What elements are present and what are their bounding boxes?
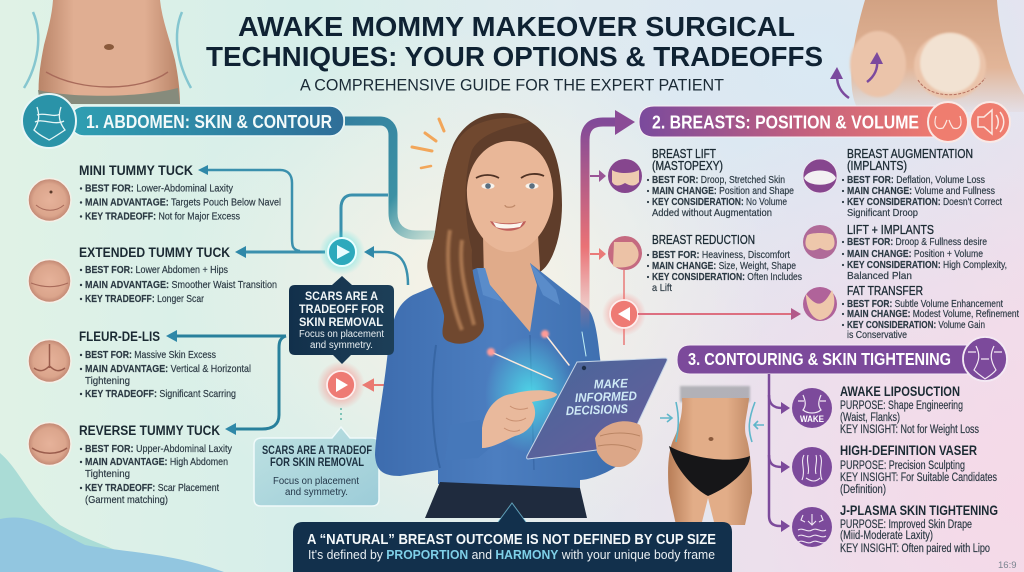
callout: scars dark: SCARS ARE A: [305, 289, 378, 303]
connectors: tummy tuck arrows: [166, 165, 408, 435]
panel: item awake liposuction: AWAKE LIPOSUCTION: [840, 384, 960, 399]
panel: item mini tummy tuck: [28, 163, 281, 222]
callout: scars dark: Focus on placement: [299, 329, 384, 340]
panel: item reverse tummy tuck: Tightening: [85, 468, 130, 480]
panel: item extended tummy tuck: EXTENDED TUMMY TUCK: [79, 245, 230, 260]
panel: item fleur-de-lis: FLEUR-DE-LIS: [79, 329, 160, 344]
panel: item awake liposuction: KEY INSIGHT: Not for Weight Loss: [840, 424, 979, 436]
title: AWAKE MOMMY MAKEOVER SURGICAL: [238, 11, 795, 42]
panel: item fat transfer: FAT TRANSFER: [847, 284, 923, 298]
callout: scars light: Focus on placement: [273, 476, 359, 487]
arrowhead: breasts trunk: [615, 110, 635, 135]
icon: orange sparks: [412, 119, 444, 168]
tablet: INFORMED: [575, 389, 637, 405]
panel: item breast reduction: a Lift: [652, 282, 672, 294]
light rays: [487, 330, 586, 379]
tablet: DECISIONS: [566, 402, 629, 418]
icon: wake: [792, 388, 832, 428]
button: red play: [317, 361, 384, 422]
panel: item fat transfer: is Conservative: [847, 329, 907, 341]
panel: item lift plus implants: KEY CONSIDERATION: High Complexity,: [847, 259, 1007, 271]
panel: item breast lift: (MASTOPEXY): [652, 159, 723, 173]
callout: scars light: FOR SKIN REMOVAL: [270, 457, 364, 469]
panel: item breast augmentation: KEY CONSIDERATION: Doesn't Correct: [847, 196, 1002, 208]
panel: item mini tummy tuck: MINI TUMMY TUCK: [79, 163, 193, 178]
panel: item lift plus implants: MAIN CHANGE: Position + Volume: [847, 248, 983, 260]
panel: item breast lift: MAIN CHANGE: Position and Shape: [652, 185, 794, 197]
right hand: [595, 421, 643, 467]
panel: item j-plasma: (Miid-Moderate Laxity): [840, 530, 933, 542]
face: [467, 141, 553, 252]
icon: fleur-de-lis scar: [28, 340, 71, 382]
icon: fat transfer: [803, 287, 837, 321]
icon: extended tuck: [28, 260, 71, 302]
icon: mini tuck: [28, 178, 71, 222]
panel: breasts header: [639, 102, 1010, 142]
panel: item high-definition vaser: PURPOSE: Precision Sculpting: [840, 460, 965, 472]
icon: implant: [803, 159, 837, 193]
panel: item mini tummy tuck: MAIN ADVANTAGE: Targets Pouch Below Navel: [85, 196, 281, 208]
panel: item lift plus implants: LIFT + IMPLANTS: [847, 223, 934, 237]
panel: item j-plasma: PURPOSE: Improved Skin Drape: [840, 519, 972, 531]
panel: item breast reduction: BEST FOR: Heaviness, Discomfort: [652, 249, 790, 261]
panel: item breast reduction: BREAST REDUCTION: [652, 233, 755, 247]
panel: item fleur-de-lis: BEST FOR: Massive Skin Excess: [85, 349, 216, 361]
connector: contouring tree: [769, 374, 790, 532]
panel: item breast augmentation: [803, 147, 1002, 219]
icon: reverse tuck: [28, 422, 71, 466]
panel: item breast lift: KEY CONSIDERATION: No Volume: [652, 196, 787, 208]
panel: item extended tummy tuck: [28, 245, 277, 305]
brows eyes nose mouth: [476, 174, 544, 231]
button: teal play: [319, 229, 365, 275]
icon: abdomen: [22, 94, 76, 148]
panel: item breast lift: Added without Augmentation: [652, 207, 772, 219]
panel: abdomen header: 1. ABDOMEN: SKIN & CONTOUR: [86, 112, 332, 132]
connector: abdomen trunk: [345, 121, 436, 235]
icon: breasts: [928, 102, 968, 142]
callout: scars dark: TRADEOFF FOR: [299, 302, 384, 316]
panel: item breast lift: [608, 147, 794, 219]
icon: waist: [963, 337, 1007, 381]
panel: item breast augmentation: MAIN CHANGE: Volume and Fullness: [847, 185, 995, 197]
panel: item lift plus implants: BEST FOR: Droop & Fullness desire: [847, 236, 987, 248]
callout: scars light: SCARS ARE A TRADEOF: [262, 445, 372, 457]
panel: item fleur-de-lis: MAIN ADVANTAGE: Vertical & Horizontal: [85, 363, 251, 375]
panel: item fleur-de-lis: KEY TRADEOFF: Significant Scarring: [85, 388, 236, 400]
panel: item reverse tummy tuck: REVERSE TUMMY TUCK: [79, 423, 220, 438]
photo: contoured torso: [660, 386, 764, 530]
tablet: [527, 358, 667, 459]
panel: item j-plasma: KEY INSIGHT: Often paired with Lipo: [840, 543, 990, 555]
pointing hand: [482, 390, 557, 448]
aspect ratio label: 16:9: [998, 560, 1016, 571]
panel: item breast augmentation: BEST FOR: Deflation, Volume Loss: [847, 174, 985, 186]
panel: item high-definition vaser: [792, 443, 997, 496]
callout: scars light: and symmetry.: [285, 487, 348, 498]
panel: item fat transfer: [803, 284, 1019, 341]
illustration: presenter: [375, 113, 667, 518]
pants: [425, 482, 587, 518]
hair left lock: [428, 118, 530, 344]
panel: item fleur-de-lis: Tightening: [85, 375, 130, 387]
panel: item breast augmentation: Significant Droop: [847, 207, 918, 219]
callout: natural outcome banner: [293, 503, 732, 572]
panel: item fleur-de-lis: [28, 329, 251, 400]
title: [206, 11, 823, 72]
panel: item breast augmentation: BREAST AUGMENTATION: [847, 147, 973, 161]
icon: reduction: [608, 236, 642, 270]
panel: item lift plus implants: Balanced Plan: [847, 270, 912, 282]
panel: item reverse tummy tuck: KEY TRADEOFF: Scar Placement: [85, 482, 219, 494]
blouse: [375, 263, 618, 492]
panel: item breast reduction: MAIN CHANGE: Size, Weight, Shape: [652, 260, 796, 272]
connector: small breast arrows: [590, 170, 606, 260]
panel: item j-plasma: [792, 503, 998, 555]
callout: scars dark: [289, 276, 394, 364]
panel: item extended tummy tuck: MAIN ADVANTAGE: Smoother Waist Transition: [85, 279, 277, 291]
panel: contouring header: [677, 337, 1007, 381]
photo: chest with lift arrows: [830, 0, 1024, 112]
icon: speaker: [970, 102, 1010, 142]
panel: item mini tummy tuck: KEY TRADEOFF: Not for Major Excess: [85, 210, 240, 222]
panel: item breast reduction: [608, 233, 802, 294]
panel: breasts header: 2. BREASTS: POSITION & VOLUME: [652, 112, 919, 132]
background waves: [0, 453, 224, 572]
panel: contouring header: 3. CONTOURING & SKIN TIGHTENING: [688, 349, 951, 369]
panel: item extended tummy tuck: BEST FOR: Lower Abdomen + Hips: [85, 264, 228, 276]
panel: item breast reduction: KEY CONSIDERATION: Often Includes: [652, 271, 802, 283]
control: fat transfer arrow: [602, 270, 801, 345]
hair back: [427, 113, 562, 344]
panel: item extended tummy tuck: KEY TRADEOFF: Longer Scar: [85, 293, 204, 305]
panel: item high-definition vaser: (Definition): [840, 484, 886, 496]
callout: scars light: [254, 427, 379, 506]
panel: item awake liposuction: PURPOSE: Shape Engineering: [840, 400, 963, 412]
panel: item reverse tummy tuck: (Garment matching): [85, 494, 168, 506]
callout: scars dark: and symmetry.: [310, 340, 373, 351]
glow: [485, 337, 575, 453]
icon: skin waves: [792, 507, 832, 547]
panel: item breast lift: BEST FOR: Droop, Stretched Skin: [652, 174, 785, 186]
panel: abdomen header: [22, 94, 344, 148]
connector: breasts trunk arrow: [585, 122, 620, 330]
tablet: MAKE: [594, 376, 629, 392]
panel: item reverse tummy tuck: [28, 422, 233, 506]
hair highlights: [448, 230, 474, 330]
panel: item mini tummy tuck: BEST FOR: Lower-Abdominal Laxity: [85, 182, 234, 194]
panel: item breast augmentation: (IMPLANTS): [847, 159, 907, 173]
panel: item awake liposuction: (Waist, Flanks): [840, 412, 900, 424]
panel: item fat transfer: KEY CONSIDERATION: Volume Gain: [847, 319, 985, 331]
panel: item awake liposuction: [792, 384, 979, 436]
icon: vaser: [792, 447, 832, 487]
callout: scars dark: SKIN REMOVAL: [299, 315, 383, 329]
panel: item breast lift: BREAST LIFT: [652, 147, 716, 161]
icon: wake: WAKE: [800, 414, 824, 424]
title: TECHNIQUES: YOUR OPTIONS & TRADEOFFS: [206, 41, 823, 72]
cuff and forearm: [445, 420, 490, 460]
photo: abdomen with scar: [24, 0, 191, 104]
icon: lift plus implants: [803, 225, 837, 259]
panel: item high-definition vaser: HIGH-DEFINITION VASER: [840, 443, 977, 458]
collar: [477, 263, 560, 305]
panel: item reverse tummy tuck: BEST FOR: Upper-Abdominal Laxity: [85, 443, 233, 455]
neck: [483, 235, 540, 335]
panel: item lift plus implants: [803, 223, 1007, 282]
panel: item reverse tummy tuck: MAIN ADVANTAGE: High Abdomen: [85, 456, 228, 468]
callout: natural outcome banner: It's defined by PROPORTION and HARMONY with your unique body frame: [308, 548, 715, 562]
icon: lift: [608, 159, 642, 193]
subtitle: A COMPREHENSIVE GUIDE FOR THE EXPERT PATIENT: [300, 76, 724, 94]
callout: natural outcome banner: A “NATURAL” BREAST OUTCOME IS NOT DEFINED BY CUP SIZE: [307, 532, 716, 548]
